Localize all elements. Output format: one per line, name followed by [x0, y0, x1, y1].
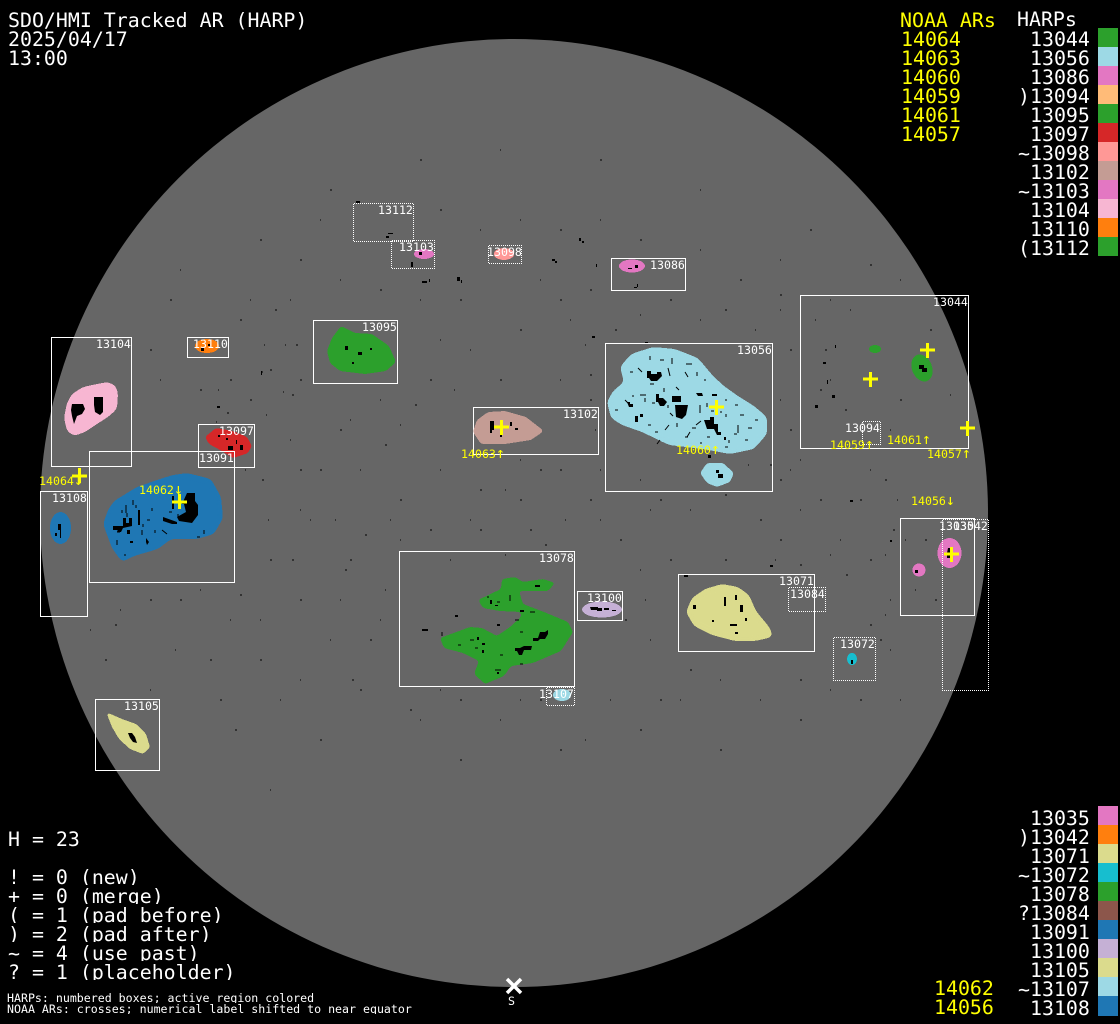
statistics block: ( = 1 (pad before)	[8, 904, 224, 927]
statistics block: ) = 2 (pad after)	[8, 923, 212, 946]
HARPs list top: 13097	[1030, 123, 1090, 146]
active region blobs 13035	[912, 538, 962, 576]
solar disk	[40, 39, 988, 987]
HARP region 13042	[942, 519, 988, 690]
HARPs list top: ~13098	[1018, 142, 1090, 165]
active region blob 13102	[473, 411, 544, 444]
label 13078: 13078	[539, 551, 574, 565]
HARPs list bottom: 13035	[1030, 807, 1090, 830]
active region blob 13095	[327, 326, 396, 374]
NOAA ARs list top: 14064	[901, 28, 961, 51]
active region blob 13044	[869, 345, 937, 385]
speck clumps	[217, 201, 892, 631]
active region blob 13105	[106, 712, 150, 754]
label 13104: 13104	[96, 337, 131, 351]
HARP region 13108	[40, 491, 88, 616]
label 13107: 13107	[539, 687, 574, 701]
HARPs list top: 13044	[1030, 28, 1090, 51]
HARPs list bottom: ~13072	[1018, 864, 1090, 887]
label 13086: 13086	[650, 258, 685, 272]
color swatches top	[1098, 28, 1118, 256]
NOAA numerical labels: 14059↑	[830, 435, 874, 453]
active region blob 13103	[414, 249, 434, 259]
label 13084: 13084	[790, 587, 825, 601]
south label: S	[508, 994, 515, 1008]
active region blob 13078	[440, 577, 573, 684]
active region blob 13110	[195, 339, 219, 353]
HARP region 13105	[96, 699, 160, 770]
HARP region 13086	[612, 258, 686, 290]
NOAA numerical labels: 14062↓	[139, 480, 183, 498]
NOAA crosses	[72, 343, 975, 562]
statistics block: ~ = 4 (use past)	[8, 942, 200, 965]
HARPs list top	[1017, 8, 1090, 260]
HARP region 13094	[845, 421, 880, 444]
HARP region 13084	[788, 587, 826, 612]
HARP region 13102	[473, 407, 598, 454]
NOAA ARs list top: 14057	[901, 123, 961, 146]
label 13042: 13042	[953, 519, 988, 533]
label 13112: 13112	[378, 203, 413, 217]
active region blob 13086	[619, 260, 645, 272]
color swatches bottom	[1098, 806, 1118, 1016]
statistics block: ? = 1 (placeholder)	[8, 961, 236, 984]
HARPs list top: 13086	[1030, 66, 1090, 89]
HARPs list top: (13112	[1018, 237, 1090, 260]
HARPs list bottom	[1018, 807, 1090, 1020]
HARPs list bottom: ?13084	[1018, 902, 1090, 925]
south pole marker	[507, 979, 521, 1008]
HARP region 13078	[400, 551, 574, 686]
statistics block: ! = 0 (new)	[8, 866, 140, 889]
HARPs list top: 13095	[1030, 104, 1090, 127]
NOAA ARs list bottom	[934, 977, 994, 1019]
HARPs list top: ~13103	[1018, 180, 1090, 203]
NOAA numerical labels: 14057↑	[927, 444, 971, 462]
label 13100: 13100	[587, 591, 622, 605]
title block: 2025/04/17	[8, 28, 128, 51]
active region blob 13072	[847, 653, 857, 665]
HARPs list top: 13104	[1030, 199, 1090, 222]
HARPs list bottom: 13108	[1030, 997, 1090, 1020]
HARPs list top: 13056	[1030, 47, 1090, 70]
statistics block: + = 0 (merge)	[8, 885, 164, 908]
HARP region 13071	[678, 574, 814, 652]
label 13071: 13071	[779, 574, 814, 588]
HARPs list bottom: 13105	[1030, 959, 1090, 982]
HARP region 13104	[52, 337, 132, 466]
NOAA ARs list bottom: 14056	[934, 996, 994, 1019]
NOAA ARs list top: 14060	[901, 66, 961, 89]
HARPs list bottom: 13100	[1030, 940, 1090, 963]
small penumbra spot	[716, 470, 723, 478]
statistics block: H = 23	[8, 828, 80, 851]
NOAA numerical labels: 14056↓	[911, 491, 955, 509]
explanatory note	[0, 991, 420, 1017]
active region blob 13091	[103, 473, 223, 562]
label 13091: 13091	[199, 451, 234, 465]
label 13105: 13105	[124, 699, 159, 713]
HARP region 13091	[90, 451, 234, 582]
HARPs list top: 13102	[1030, 161, 1090, 184]
label 13095: 13095	[362, 320, 397, 334]
NOAA ARs list top: NOAA ARs	[900, 9, 996, 32]
active region blob 13104	[64, 382, 118, 436]
label 13056: 13056	[737, 343, 772, 357]
HARP region 13072	[834, 637, 876, 680]
HARP region 13110	[188, 337, 228, 358]
HARP region 13097	[198, 424, 254, 468]
HARPs list top: 13110	[1030, 218, 1090, 241]
NOAA ARs list top: 14059	[901, 85, 961, 108]
HARPs list top: HARPs	[1017, 8, 1077, 31]
NOAA ARs list top: 14063	[901, 47, 961, 70]
active region blob 13056	[607, 347, 767, 454]
label 13072: 13072	[840, 637, 875, 651]
label 13108: 13108	[52, 491, 87, 505]
label 13102: 13102	[563, 407, 598, 421]
HARPs list bottom: ~13107	[1018, 978, 1090, 1001]
HARPs list bottom: 13091	[1030, 921, 1090, 944]
active region blob 13071	[686, 584, 773, 641]
NOAA ARs list top	[900, 9, 996, 146]
label 13103: 13103	[399, 240, 434, 254]
HARP region 13100	[578, 591, 622, 620]
label 13044: 13044	[933, 295, 968, 309]
HARP region 13107	[539, 687, 574, 706]
statistics block	[0, 828, 240, 985]
title block: SDO/HMI Tracked AR (HARP)	[8, 9, 307, 32]
HARP region 13035	[900, 518, 974, 616]
explanatory note: HARPs: numbered boxes; active region colored	[7, 991, 314, 1005]
NOAA numerical labels	[39, 430, 971, 509]
active region blob 13107	[553, 689, 571, 701]
label 13110: 13110	[193, 337, 228, 351]
title block: 13:00	[8, 47, 68, 70]
label 13097: 13097	[219, 424, 254, 438]
HARP region 13044	[800, 295, 968, 448]
NOAA numerical labels: 14061↑	[887, 430, 931, 448]
NOAA ARs list top: 14061	[901, 104, 961, 127]
HARP region 13095	[314, 320, 398, 384]
HARPs list bottom: )13042	[1018, 826, 1090, 849]
NOAA numerical labels: 14063↑	[461, 444, 505, 462]
HARPs list top: )13094	[1018, 85, 1090, 108]
label 13094: 13094	[845, 421, 880, 435]
active region blob 13100	[582, 602, 622, 618]
explanatory note: NOAA ARs: crosses; numerical label shifted to near equator	[7, 1002, 412, 1016]
HARP region 13112	[354, 203, 414, 242]
NOAA numerical labels: 14060↑	[676, 440, 720, 458]
scattered sunspot specks	[90, 150, 951, 790]
HARP region 13056	[606, 343, 772, 492]
HARP region 13103	[392, 240, 434, 268]
HARPs list bottom: 13071	[1030, 845, 1090, 868]
active region blob 13108	[50, 512, 71, 544]
NOAA numerical labels: 14064↓	[39, 471, 83, 489]
HARPs list bottom: 13078	[1030, 883, 1090, 906]
HARP region 13098	[487, 245, 522, 264]
NOAA ARs list bottom: 14062	[934, 977, 994, 1000]
title block	[8, 9, 307, 70]
active region blob 13097	[205, 428, 252, 458]
label 13098: 13098	[487, 245, 522, 259]
active region blob 13098	[494, 248, 514, 260]
label 13035: 13035	[939, 519, 974, 533]
